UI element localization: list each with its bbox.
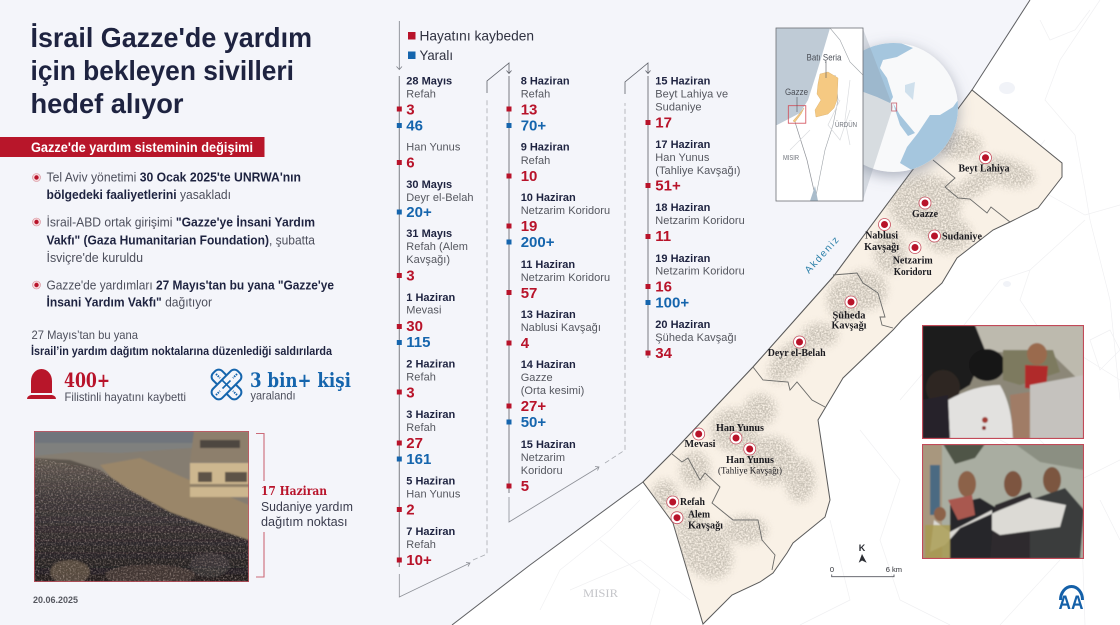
entry: 13 Haziran Nablusi Kavşağı: 13 Haziran [521, 309, 576, 321]
entry: 2 Haziran Refah: 3 [406, 384, 415, 402]
entry: 7 Haziran Refah [397, 526, 455, 569]
north arrow and scale bar: K [859, 543, 866, 553]
entry: 19 Haziran Netzarim Koridoru: 19 Haziran [655, 253, 711, 265]
entry: 17 Haziran Han Yunus (Tahliye Kavşağı): 17 Haziran [655, 139, 711, 151]
entry: 9 Haziran Refah [506, 142, 570, 185]
entry: 3 Haziran Refah: 161 [406, 451, 431, 468]
entry: 10 Haziran Netzarim Koridoru [506, 192, 610, 251]
entry: 13 Haziran Nablusi Kavşağı: Nablusi Kavşağı [521, 322, 601, 334]
entry: 1 Haziran Mevasi: Mevasi [406, 304, 441, 316]
section heading [0, 137, 264, 157]
pin: Mevasi [684, 428, 716, 450]
bullet 2 [32, 214, 315, 265]
bullet 1: bölgedeki faaliyetlerini yasakladı [46, 188, 231, 202]
entry: 11 Haziran Netzarim Koridoru: 11 Haziran [521, 259, 575, 271]
entry: 31 Mayıs Refah (Alem Kavşağı): Refah (Alem [406, 241, 468, 253]
bullet 3: Gazze'de yardımları 27 Mayıs'tan bu yana "Gazze'ye [46, 278, 334, 292]
entry: 20 Haziran Şüheda Kavşağı [646, 319, 737, 362]
pin: Netzarim Koridoru: Koridoru [894, 266, 932, 278]
entry: 15 Haziran Netzarim Koridoru: Koridoru [521, 465, 563, 477]
pin: Sudaniye: Sudaniye [942, 230, 982, 242]
entry: 10 Haziran Netzarim Koridoru: 10 Haziran [521, 192, 576, 204]
bullet 1 [32, 171, 301, 202]
pin: Han Yunus: Han Yunus [716, 422, 765, 434]
entry: 1 Haziran Mevasi [397, 292, 455, 351]
north arrow and scale bar: 6 km [886, 565, 902, 574]
entry: Han Yunus [397, 142, 461, 172]
entry: 8 Haziran Refah: 13 [521, 102, 537, 118]
entry: 15 Haziran Beyt Lahiya ve Sudaniye: Beyt Lahiya ve [655, 88, 728, 100]
stat: killed [64, 368, 186, 404]
title: İsrail Gazze'de yardım [30, 22, 312, 53]
entry: 8 Haziran Refah [506, 76, 570, 134]
entry: 31 Mayıs Refah (Alem Kavşağı) [397, 228, 468, 284]
entry: 1 Haziran Mevasi: 115 [406, 334, 431, 351]
label: Mediterranean: Akdeniz [803, 234, 843, 276]
photo: men carrying shrouded child [922, 444, 1084, 559]
entry: 20 Haziran Şüheda Kavşağı: 34 [655, 345, 673, 362]
map: Gaza Strip [643, 90, 1062, 624]
legend [408, 28, 534, 63]
bullet list [32, 171, 334, 310]
inset label: Mısır: MISIR [783, 155, 799, 162]
entry: Han Yunus: 6 [406, 154, 415, 172]
arrow: column 1 to column 2 [399, 63, 512, 597]
stat: killed: 400+ [64, 368, 110, 392]
entry: 3 Haziran Refah: Refah [406, 422, 436, 434]
north arrow and scale bar [830, 543, 902, 577]
pin: Deyr el-Belah: Deyr el-Belah [768, 347, 826, 359]
timeline column 3 [646, 76, 745, 362]
bullet 2: İsrail-ABD ortak girişimi "Gazze'ye İnsani Yardım [46, 214, 315, 230]
pin: Beyt Lahiya: Beyt Lahiya [958, 163, 1010, 175]
entry: 17 Haziran Han Yunus (Tahliye Kavşağı): (Tahliye Kavşağı) [655, 165, 741, 177]
entry: 28 Mayıs Refah: 3 [406, 102, 415, 118]
arrow: timeline start [396, 21, 402, 70]
entry: 15 Haziran Beyt Lahiya ve Sudaniye [646, 76, 728, 132]
pin: Han Yunus [716, 422, 765, 444]
entry: 28 Mayıs Refah: 28 Mayıs [406, 76, 452, 88]
entry: 10 Haziran Netzarim Koridoru: Netzarim Koridoru [521, 205, 610, 217]
entry: 20 Haziran Şüheda Kavşağı: 20 Haziran [655, 319, 711, 331]
entry: 15 Haziran Netzarim Koridoru: Netzarim [521, 452, 565, 464]
section heading: Gazze'de yardım sisteminin değişimi [31, 139, 253, 155]
label: Egypt: MISIR [583, 588, 618, 600]
timeline column 2 [506, 76, 610, 495]
attacks intro: 27 Mayıs’tan bu yana [32, 328, 138, 342]
entry: 19 Haziran Netzarim Koridoru: 100+ [655, 294, 689, 312]
entry: 17 Haziran Han Yunus (Tahliye Kavşağı) [646, 139, 741, 194]
map labels [667, 152, 1010, 531]
pin: Refah: Refah [680, 496, 705, 508]
entry: 8 Haziran Refah: 8 Haziran [521, 76, 570, 88]
AA logo: AA [1058, 593, 1084, 614]
entry: 8 Haziran Refah: 70+ [521, 118, 546, 134]
pin: Alem Kavşağı [671, 508, 723, 532]
entry: 15 Haziran Beyt Lahiya ve Sudaniye: 17 [655, 114, 672, 132]
entry: 13 Haziran Nablusi Kavşağı: 4 [521, 335, 530, 352]
photo caption [261, 484, 353, 529]
pin: Sudaniye [928, 230, 982, 242]
entry: 10 Haziran Netzarim Koridoru: 200+ [521, 234, 555, 251]
pin: Han Yunus (Tahliye Kavşağı) [718, 443, 782, 476]
entry: 18 Haziran Netzarim Koridoru: 11 [655, 228, 671, 245]
pin: Han Yunus (Tahliye Kavşağı): Han Yunus [726, 454, 775, 466]
entry: 31 Mayıs Refah (Alem Kavşağı): Kavşağı) [406, 254, 450, 266]
entry: 28 Mayıs Refah: 46 [406, 118, 423, 134]
photo caption: 17 Haziran [261, 484, 327, 498]
photo: grieving family [922, 325, 1084, 440]
entry: 14 Haziran Gazze (Orta kesimi): Gazze [521, 372, 553, 384]
north arrow and scale bar: 0 [830, 565, 834, 574]
entry: 28 Mayıs Refah: Refah [406, 88, 436, 100]
pin: Beyt Lahiya [958, 152, 1010, 175]
entry: 3 Haziran Refah: 27 [406, 435, 423, 452]
entry: 7 Haziran Refah: 7 Haziran [406, 526, 455, 538]
entry: 17 Haziran Han Yunus (Tahliye Kavşağı): Han Yunus [655, 152, 710, 164]
entry: 5 Haziran Han Yunus: Han Yunus [406, 488, 461, 500]
inset label: Gazze: Gazze [785, 87, 808, 98]
entry: 13 Haziran Nablusi Kavşağı [506, 309, 601, 352]
bullet 2: Vakfı" (Gaza Humanitarian Foundation), şubatta [46, 234, 315, 248]
entry: 15 Haziran Beyt Lahiya ve Sudaniye: 15 Haziran [655, 76, 711, 88]
entry: 3 Haziran Refah: 3 Haziran [406, 409, 455, 421]
bullet 2: İsviçre'de kuruldu [46, 251, 143, 265]
entry: 17 Haziran Han Yunus (Tahliye Kavşağı): 51+ [655, 178, 681, 194]
stat: killed: Filistinli hayatını kaybetti [64, 390, 186, 404]
inset label: Batı Şeria: Batı Şeria [806, 52, 842, 62]
attacks intro: İsrail’in yardım dağıtım noktalarına düzenlediği saldırılarda [31, 343, 332, 358]
pin: Nablusi Kavşağı [864, 218, 899, 253]
entry: 30 Mayıs Deyr el-Belah [397, 179, 474, 221]
entry: 14 Haziran Gazze (Orta kesimi): 14 Haziran [521, 359, 576, 371]
pin: Gazze: Gazze [912, 208, 938, 220]
bullet 1: Tel Aviv yönetimi 30 Ocak 2025'te UNRWA'nın [46, 171, 301, 185]
legend: Yaralı [420, 47, 453, 63]
pin: Şüheda Kavşağı [832, 296, 866, 332]
pin: Deyr el-Belah [768, 336, 826, 359]
entry: 5 Haziran Han Yunus [397, 476, 461, 518]
entry: 30 Mayıs Deyr el-Belah: Deyr el-Belah [406, 192, 474, 204]
pin: Refah [667, 496, 705, 508]
entry: 3 Haziran Refah [397, 409, 455, 468]
stat: wounded: yaralandı [250, 388, 296, 402]
photo caption: Sudaniye yardım [261, 499, 353, 514]
entry: 9 Haziran Refah: Refah [521, 155, 550, 167]
stat: wounded [250, 368, 351, 402]
entry: 11 Haziran Netzarim Koridoru [506, 259, 610, 302]
inset label: Ürdün: ÜRDÜN [835, 121, 857, 129]
stat: wounded: 3 bin+ kişi [250, 368, 351, 392]
entry: 19 Haziran Netzarim Koridoru [646, 253, 745, 312]
entry: 31 Mayıs Refah (Alem Kavşağı): 3 [406, 268, 415, 284]
globe [863, 39, 966, 184]
entry: 14 Haziran Gazze (Orta kesimi) [506, 359, 584, 431]
entry: 5 Haziran Han Yunus: 5 Haziran [406, 476, 455, 488]
entry: 15 Haziran Netzarim Koridoru: 5 [521, 478, 529, 495]
entry: 30 Mayıs Deyr el-Belah: 30 Mayıs [406, 179, 452, 191]
entry: 19 Haziran Netzarim Koridoru: 16 [655, 278, 672, 296]
pin: Netzarim Koridoru [893, 242, 933, 278]
pin: Şüheda Kavşağı: Kavşağı [832, 320, 866, 332]
entry: 15 Haziran Netzarim Koridoru: 15 Haziran [521, 439, 576, 451]
pin: Nablusi Kavşağı: Kavşağı [864, 241, 899, 253]
entry: 7 Haziran Refah: Refah [406, 539, 436, 551]
entry: 1 Haziran Mevasi: 1 Haziran [406, 292, 455, 304]
attacks intro [31, 328, 332, 358]
entry: Han Yunus: Han Yunus [406, 142, 461, 154]
arrow: column 2 to column 3 [509, 63, 650, 522]
pin: Netzarim Koridoru: Netzarim [893, 254, 933, 266]
entry: 14 Haziran Gazze (Orta kesimi): 27+ [521, 398, 546, 415]
icon: bandage [210, 368, 243, 401]
photo caption: dağıtım noktası [261, 514, 348, 529]
entry: 18 Haziran Netzarim Koridoru: Netzarim Koridoru [655, 215, 745, 227]
entry: 15 Haziran Beyt Lahiya ve Sudaniye: Sudaniye [655, 102, 702, 114]
legend: Hayatını kaybeden [420, 28, 534, 44]
entry: 11 Haziran Netzarim Koridoru: 57 [521, 285, 537, 302]
pin: Gazze [912, 197, 938, 220]
pin: Şüheda Kavşağı: Şüheda [832, 310, 866, 322]
entry: 9 Haziran Refah: 10 [521, 168, 537, 185]
icon: tombstone [27, 369, 56, 399]
entry: 5 Haziran Han Yunus: 2 [406, 502, 415, 518]
title: için bekleyen sivilleri [30, 55, 294, 86]
bracket [256, 434, 264, 577]
entry: 14 Haziran Gazze (Orta kesimi): (Orta kesimi) [521, 385, 584, 397]
entry: 10 Haziran Netzarim Koridoru: 19 [521, 218, 537, 235]
entry: 15 Haziran Netzarim Koridoru [506, 439, 576, 495]
entry: 2 Haziran Refah [397, 358, 455, 402]
entry: 31 Mayıs Refah (Alem Kavşağı): 31 Mayıs [406, 228, 452, 240]
entry: 14 Haziran Gazze (Orta kesimi): 50+ [521, 414, 546, 431]
photo: crowd at Sudaniye aid point [34, 431, 249, 585]
entry: 1 Haziran Mevasi: 30 [406, 318, 423, 335]
title: hedef alıyor [30, 88, 184, 119]
entry: 18 Haziran Netzarim Koridoru: 18 Haziran [655, 202, 711, 214]
map: land [452, 0, 1120, 625]
title [30, 22, 312, 119]
entry: 30 Mayıs Deyr el-Belah: 20+ [406, 204, 432, 221]
pin: Alem Kavşağı: Alem [688, 508, 710, 520]
entry: 9 Haziran Refah: 9 Haziran [521, 142, 570, 154]
bullet 3 [32, 278, 334, 310]
entry: 28 Mayıs Refah [397, 76, 452, 134]
entry: 2 Haziran Refah: 2 Haziran [406, 358, 455, 370]
pin: Han Yunus (Tahliye Kavşağı): (Tahliye Kavşağı) [718, 466, 782, 476]
entry: 18 Haziran Netzarim Koridoru [646, 202, 745, 245]
pin: Alem Kavşağı: Kavşağı [688, 520, 723, 532]
pin: Mevasi: Mevasi [684, 438, 716, 450]
entry: 11 Haziran Netzarim Koridoru: Netzarim Koridoru [521, 272, 610, 284]
entry: 20 Haziran Şüheda Kavşağı: Şüheda Kavşağı [655, 332, 737, 344]
entry: 2 Haziran Refah: Refah [406, 372, 436, 384]
entry: 7 Haziran Refah: 10+ [406, 552, 432, 569]
inset connector [863, 28, 893, 201]
entry: 19 Haziran Netzarim Koridoru: Netzarim Koridoru [655, 266, 745, 278]
bullet 3: İnsani Yardım Vakfı" dağıtıyor [46, 294, 212, 310]
timeline column 1 [397, 76, 474, 569]
date: 20.06.2025 [33, 595, 79, 606]
pin: Nablusi Kavşağı: Nablusi [865, 230, 898, 242]
inset map [776, 28, 863, 201]
entry: 8 Haziran Refah: Refah [521, 88, 550, 100]
